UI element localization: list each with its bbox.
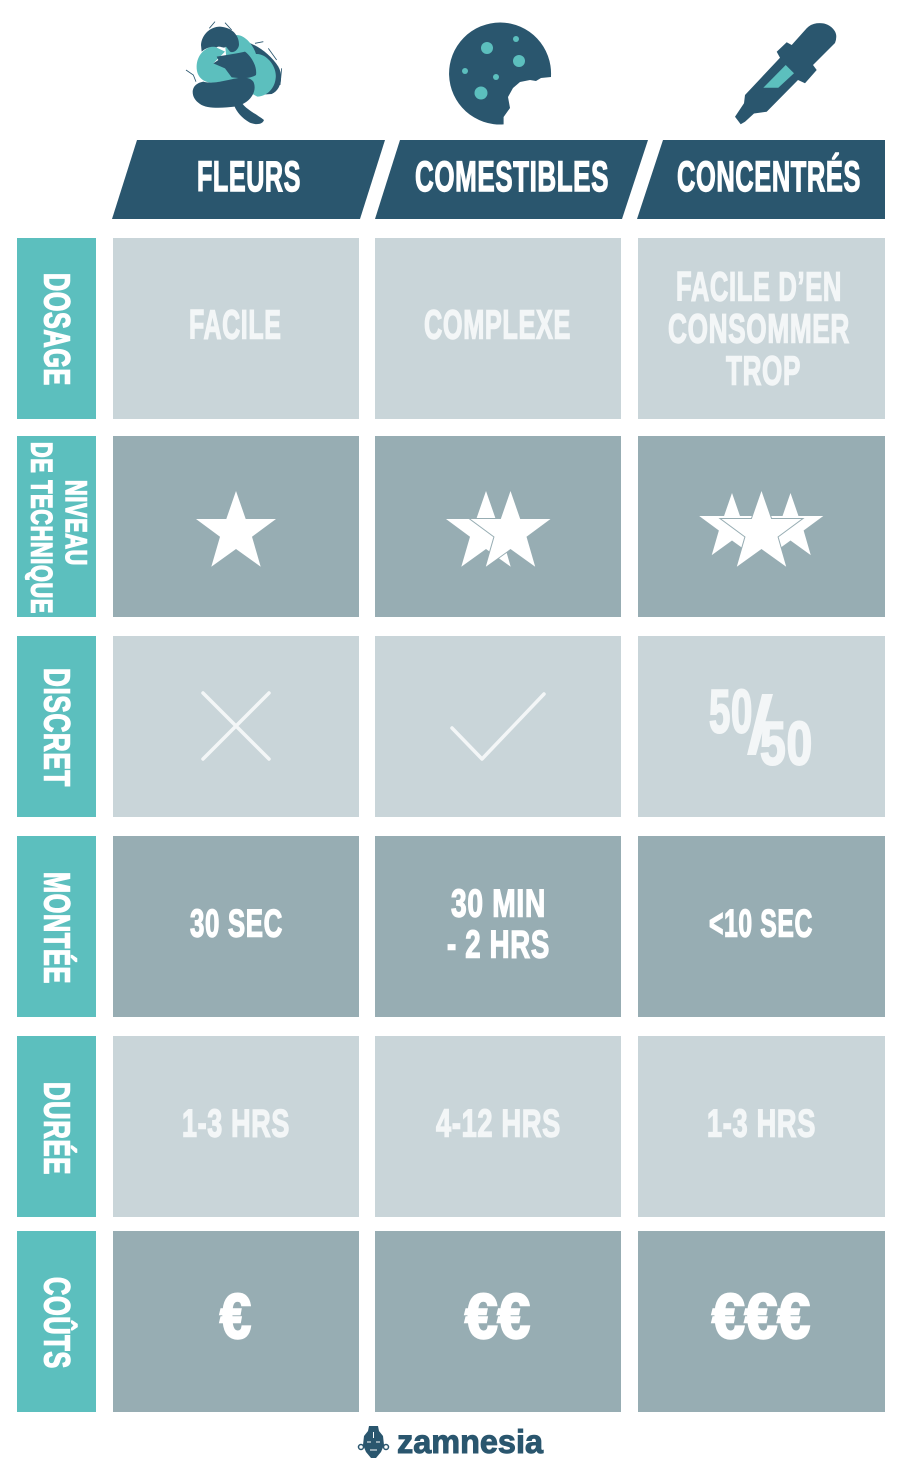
row label: coûts bbox=[17, 1231, 96, 1412]
row label: discret: DISCRET bbox=[36, 668, 78, 787]
row label: coûts: COÛTS bbox=[36, 1277, 78, 1369]
row label: niveau de technique: DE TECHNIQUE bbox=[24, 442, 58, 614]
cell: discret fleurs, cross bbox=[113, 636, 359, 817]
cell: durée comestibles bbox=[375, 1036, 621, 1217]
row label: dosage: DOSAGE bbox=[36, 273, 78, 386]
row label: montée bbox=[17, 836, 96, 1017]
icon: dropper bbox=[735, 23, 836, 124]
row label: montée: MONTÉE bbox=[36, 872, 78, 984]
row label: niveau de technique bbox=[17, 436, 96, 617]
cell: dosage concentrés bbox=[638, 238, 885, 419]
cell: discret concentrés, 50/50 bbox=[638, 636, 885, 817]
cell: montée comestibles: - 2 HRS bbox=[447, 924, 550, 966]
cell: discret concentrés, 50/50: 50 bbox=[760, 710, 813, 778]
cell: coûts concentrés: €€€ bbox=[712, 1282, 810, 1352]
row label: dosage bbox=[17, 238, 96, 419]
cell: durée fleurs: 1-3 HRS bbox=[182, 1102, 290, 1146]
row label: niveau de technique: NIVEAU bbox=[59, 480, 92, 566]
row label: discret bbox=[17, 636, 96, 817]
cell: durée comestibles: 4-12 HRS bbox=[436, 1102, 561, 1146]
row label: durée bbox=[17, 1036, 96, 1217]
cell: dosage fleurs bbox=[113, 238, 359, 419]
cell: technique fleurs, one star bbox=[113, 436, 359, 617]
cell: durée concentrés: 1-3 HRS bbox=[707, 1102, 816, 1146]
cell: coûts comestibles bbox=[375, 1231, 621, 1412]
cell: technique comestibles, two stars bbox=[375, 436, 621, 617]
cell: montée concentrés bbox=[638, 836, 885, 1017]
header: fleurs: FLEURS bbox=[197, 153, 301, 201]
icon: tribal mask bbox=[358, 1426, 388, 1458]
header: concentrés bbox=[637, 140, 885, 219]
logo: zamnesia: zamnesia bbox=[397, 1423, 544, 1460]
cell: dosage fleurs: FACILE bbox=[189, 302, 282, 348]
cell: coûts fleurs: € bbox=[220, 1282, 251, 1352]
cell: dosage comestibles bbox=[375, 238, 621, 419]
cell: dosage concentrés: TROP bbox=[726, 348, 801, 394]
cell: coûts concentrés bbox=[638, 1231, 885, 1412]
header: comestibles bbox=[375, 140, 648, 219]
cell: durée fleurs bbox=[113, 1036, 359, 1217]
cell: durée concentrés bbox=[638, 1036, 885, 1217]
cell: discret concentrés, 50/50: 50 bbox=[709, 678, 753, 746]
row label: durée: DURÉE bbox=[36, 1082, 78, 1175]
cell: dosage comestibles: COMPLEXE bbox=[424, 302, 571, 348]
cell: montée fleurs bbox=[113, 836, 359, 1017]
cell: coûts comestibles: €€ bbox=[465, 1282, 530, 1352]
icon: cannabis flower bbox=[186, 22, 282, 124]
cell: technique concentrés, three stars bbox=[638, 436, 885, 617]
header: comestibles: COMESTIBLES bbox=[415, 153, 609, 201]
icon: bitten cookie bbox=[449, 23, 551, 125]
cell: discret comestibles, check mark bbox=[375, 636, 621, 817]
cell: montée comestibles bbox=[375, 836, 621, 1017]
cell: montée fleurs: 30 SEC bbox=[190, 902, 283, 946]
cell: coûts fleurs bbox=[113, 1231, 359, 1412]
cell: montée concentrés: <10 SEC bbox=[709, 902, 813, 946]
header: fleurs bbox=[112, 140, 385, 219]
cell: montée comestibles: 30 MIN bbox=[451, 882, 546, 926]
